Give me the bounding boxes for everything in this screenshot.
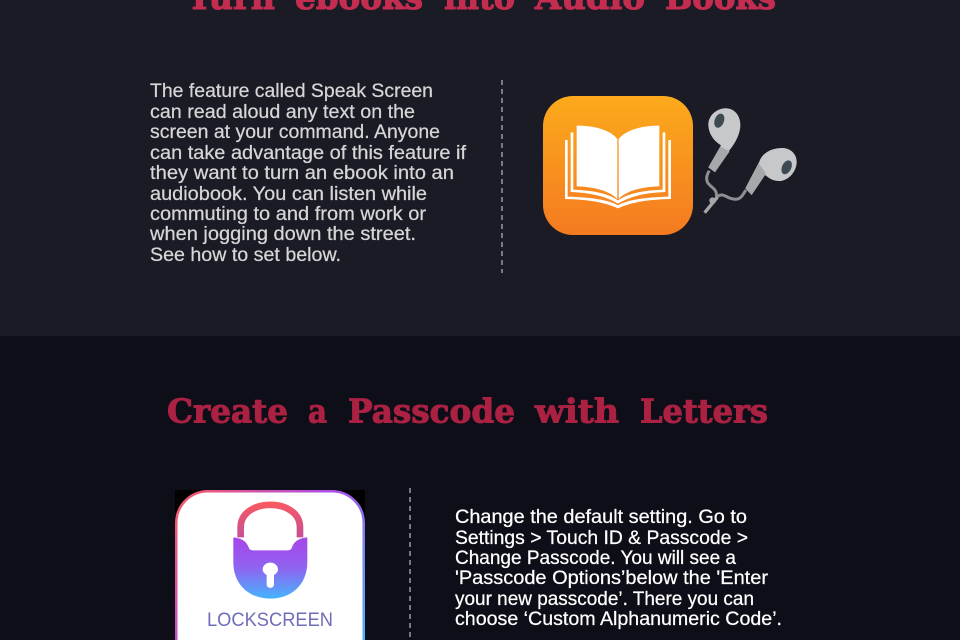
text block: passcode description: your new passcode’. There you can	[455, 588, 754, 610]
text block: speak screen description: screen at your command. Anyone	[150, 121, 440, 143]
text block: speak screen description: they want to turn an ebook into an	[150, 162, 454, 184]
panel: audio books background	[0, 0, 960, 336]
icon: orange book app	[543, 96, 693, 235]
text block: speak screen description: commuting to and from work or	[150, 203, 427, 225]
text block: speak screen description	[149, 80, 467, 266]
heading: audio books	[187, 0, 776, 17]
text block: speak screen description: can read aloud any text on the	[150, 101, 415, 123]
heading: passcode	[167, 392, 768, 430]
icon: earphones	[705, 108, 797, 213]
text block: speak screen description: See how to set below.	[150, 244, 341, 266]
text block: passcode description: Settings > Touch ID & Passcode >	[455, 527, 748, 549]
text block: passcode description: Change the default setting. Go to	[455, 506, 747, 528]
text block: passcode description: choose ‘Custom Alphanumeric Code’.	[455, 608, 782, 630]
icon: lockscreen app: LOCKSCREEN	[207, 610, 333, 631]
text block: passcode description: Change Passcode. You will see a	[455, 547, 736, 569]
text block: speak screen description: when jogging down the street.	[149, 223, 416, 245]
heading: passcode: Letters	[640, 392, 768, 430]
heading: passcode: Create	[167, 392, 288, 430]
text block: speak screen description: The feature called Speak Screen	[150, 80, 433, 102]
icon: lockscreen app	[175, 490, 365, 640]
heading: passcode: Passcode	[348, 392, 515, 430]
heading: passcode: with	[534, 392, 619, 430]
text block: speak screen description: can take advantage of this feature if	[150, 142, 467, 164]
heading: passcode: a	[308, 392, 327, 430]
text block: passcode description	[455, 506, 782, 630]
panel: passcode background	[0, 336, 960, 640]
text block: passcode description: 'Passcode Options’below the 'Enter	[455, 567, 769, 589]
text block: speak screen description: audiobook. You can listen while	[150, 183, 427, 205]
